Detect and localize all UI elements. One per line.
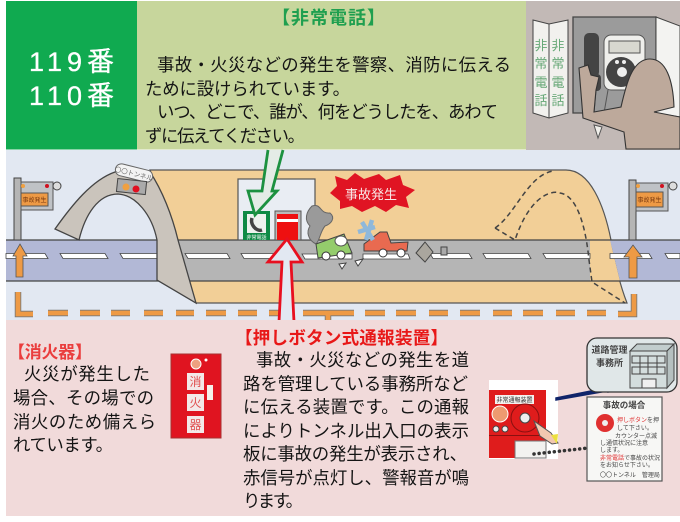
emergency bay [238, 179, 315, 240]
illustration: instructions notice: します。 [600, 447, 623, 454]
tunnel portal [55, 172, 196, 303]
lane markers [18, 292, 634, 320]
arrow: red to push button [268, 239, 302, 322]
signal: tunnel entrance [116, 179, 147, 195]
callout: accident burst: 事故発生 [345, 187, 397, 202]
road [6, 240, 680, 281]
icon: telephone body [584, 33, 645, 113]
icon: emergency telephone: 非常電話 [246, 234, 267, 241]
text block: push button description: 事故・火災などの発生を道 [256, 350, 469, 370]
heading: fire extinguisher: 【消火器】 [8, 343, 92, 362]
illustration: instructions notice: をお知らせ下さい。 [600, 461, 654, 469]
arrow: device to road office [556, 384, 618, 400]
text block: telephone description: ために設けられています。 [145, 79, 350, 99]
sign: emergency telephone pillar: 常 [551, 56, 565, 71]
sign: right information board: 事故発生 [637, 196, 662, 204]
dashed tunnel outline [495, 171, 625, 303]
panel: fire extinguisher description [8, 343, 156, 455]
sign: emergency telephone pillar: 話 [534, 93, 548, 108]
sign: left information board: 事故発生 [22, 196, 47, 204]
text block: push button description: に伝える装置です。この通報 [243, 397, 469, 417]
text block: push button description: 赤信号が点灯し、警報音が鳴 [243, 468, 469, 488]
tunnel body [150, 170, 627, 303]
illustration: instructions notice [587, 397, 662, 481]
callout: accident burst [330, 173, 415, 212]
illustration: push button device closeup: 非常通報装置 [496, 396, 533, 404]
text: 110: 110番 [29, 81, 114, 111]
text block: telephone description: ずに伝えてください。 [145, 126, 305, 146]
text block: push button description: ります。 [243, 491, 303, 511]
illustration: instructions notice: し通信状況に注意 [600, 439, 648, 447]
sign: left information board [14, 178, 61, 240]
text: 119: 119番 [29, 47, 114, 77]
crashed green car [316, 234, 352, 260]
illustration: road management office [587, 338, 677, 392]
text block: push button description: によりトンネル出入口の表示 [243, 421, 469, 441]
arrow: left orange [13, 244, 27, 277]
illustration: push button device closeup [489, 380, 558, 459]
arrow: right orange [624, 245, 642, 278]
sign: tunnel name: 〇〇トンネル [114, 165, 154, 183]
sign: emergency telephone pillar: 非 [551, 38, 565, 53]
panel: emergency telephone description [137, 1, 527, 150]
illustration: road management office: 道路管理 [591, 344, 628, 355]
panel: tunnel diagram [6, 150, 680, 322]
illustration: instructions notice: して下さい。 [617, 425, 653, 432]
illustration: instructions notice: 非常電話で事故の状況 [600, 454, 660, 462]
text block: telephone description [145, 55, 511, 146]
heading: emergency telephone: 【非常電話】 [272, 8, 385, 28]
text block: push button description [243, 350, 469, 511]
sign: emergency telephone pillar: 常 [534, 56, 548, 71]
panel: pink information area [6, 320, 680, 516]
figure: caller silhouette [579, 59, 680, 149]
text block: fire extinguisher description: 消火のため備えら [13, 412, 156, 432]
illustration: fire extinguisher box: 器 [189, 418, 202, 432]
sign: emergency telephone pillar [533, 20, 568, 118]
text block: fire extinguisher description: 場合、その場での [13, 388, 154, 408]
illustration: fire extinguisher box: 火 [189, 396, 202, 410]
sign: emergency telephone pillar: 話 [551, 93, 565, 108]
text block: telephone description: 事故・火災などの発生を警察、消防に伝える [157, 55, 511, 75]
illustration: instructions notice: 事故の場合 [603, 400, 646, 410]
debris [339, 242, 447, 269]
text block: telephone description: いつ、どこで、誰が、何をどうしたを、あわて [157, 102, 498, 122]
icon: hanging cord [594, 125, 602, 138]
illustration: road management office: 事務所 [596, 357, 623, 368]
sign: emergency telephone pillar: 電 [551, 75, 565, 90]
illustration: fire extinguisher box [171, 354, 221, 438]
illustration: instructions notice: 押しボタンを押 [617, 416, 659, 424]
icon: emergency telephone [243, 211, 270, 241]
illustration: person using emergency telephone [526, 1, 680, 150]
text block: push button description: 板に事故の発生が表示され、 [243, 444, 467, 464]
sign: emergency telephone pillar: 非 [534, 38, 548, 53]
icon: push button device [275, 211, 301, 240]
sign: right information board [629, 180, 677, 240]
arrow: green to telephone [248, 150, 283, 215]
smoke [306, 205, 333, 244]
panel: emergency numbers [6, 1, 137, 150]
text block: fire extinguisher description [13, 364, 156, 455]
text block: push button description: 路を管理している事務所など [243, 374, 468, 394]
panel: push button description [235, 328, 469, 511]
illustration: fire extinguisher box: 消 [189, 375, 202, 389]
illustration: instructions notice: カウンター点滅 [615, 432, 657, 440]
crashed red truck [358, 220, 408, 257]
illustration: instructions notice: 〇〇トンネル 管理局 [600, 471, 660, 479]
heading: push button device: 【押しボタン式通報装置】 [235, 328, 448, 348]
sign: emergency telephone pillar: 電 [534, 75, 548, 90]
text block: fire extinguisher description: れています。 [13, 435, 113, 455]
arrow: dotted device to note [534, 448, 588, 454]
text block: fire extinguisher description: 火災が発生した [24, 364, 150, 384]
